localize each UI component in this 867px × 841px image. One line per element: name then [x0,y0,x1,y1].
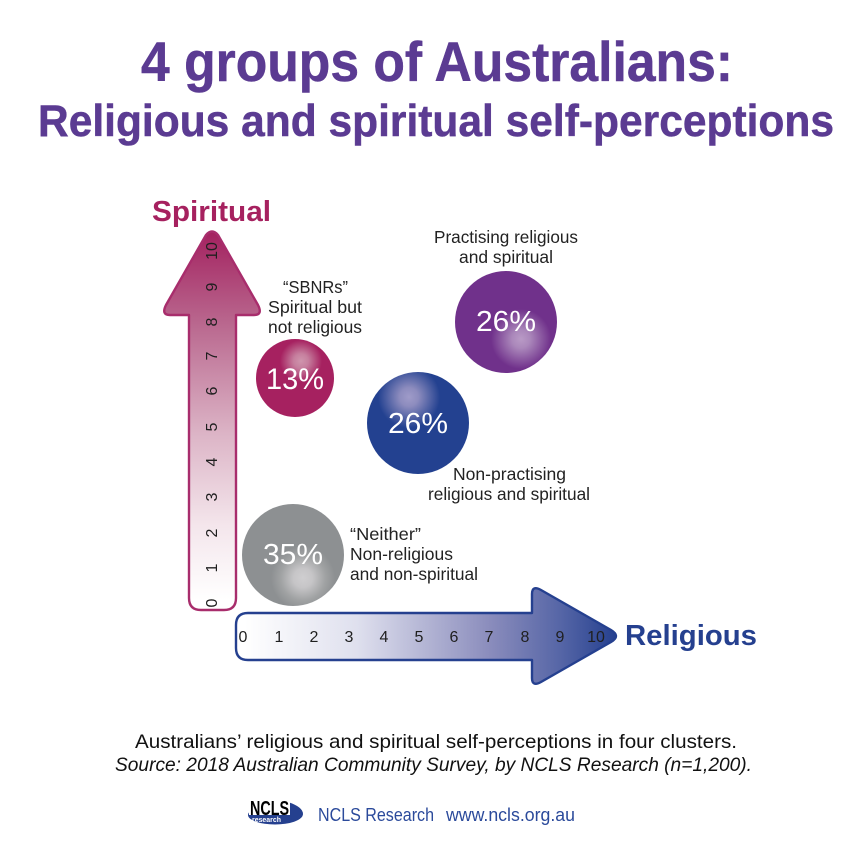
bubble: non-practising 26%: 26% [388,408,448,440]
label: non-practising religious and spiritual: religious and spiritual [428,484,590,504]
title line 1: 4 groups of Australians: [141,30,733,93]
label: SBNRs [268,277,362,337]
spiritual scale numbers: 10 [204,242,221,260]
bubble: non-practising 26% [367,372,469,474]
religious scale numbers: 8 [521,629,530,646]
caption [115,731,752,776]
religious scale numbers: 2 [310,629,319,646]
religious scale numbers: 0 [239,629,248,646]
bubble: neither 35%: 35% [263,539,323,571]
arrow: spiritual axis [164,232,260,610]
bubble: practising 26% [455,271,557,373]
label: practising religious and spiritual: Practising religious [434,227,578,247]
spiritual scale numbers: 5 [204,422,221,431]
title [38,30,834,146]
caption: Australians’ religious and spiritual self-perceptions in four clusters. [135,731,737,753]
footer: organisation and website: www.ncls.org.au [445,804,575,825]
footer: organisation and website: NCLS Research [318,804,434,825]
spiritual scale numbers: 2 [204,528,221,537]
spiritual scale numbers: 4 [204,457,221,466]
spiritual scale numbers [204,242,221,607]
label: non-practising religious and spiritual: Non-practising [453,464,566,484]
title line 2: Religious and spiritual self-perceptions [38,97,834,146]
religious scale numbers: 10 [587,629,605,646]
label: non-practising religious and spiritual [428,464,590,504]
label: SBNRs: Spiritual but [268,297,362,317]
logo: NCLS research: research [252,817,281,824]
religious scale numbers: 6 [450,629,459,646]
label: practising religious and spiritual: and spiritual [459,247,553,267]
caption: Source: 2018 Australian Community Survey, by NCLS Research (n=1,200). [115,754,752,776]
religious scale numbers: 9 [556,629,565,646]
religious scale numbers: 3 [345,629,354,646]
spiritual scale numbers: 8 [204,317,221,326]
bubble: practising 26%: 26% [476,306,536,338]
religious scale numbers: 4 [380,629,389,646]
label: neither: and non-spiritual [350,564,478,584]
spiritual scale numbers: 0 [204,598,221,607]
bubble: SBNRs 13%: 13% [266,363,324,396]
religious scale numbers [239,629,605,646]
religious scale numbers: 7 [485,629,494,646]
spiritual scale numbers: 9 [204,282,221,291]
bubble: neither 35% [242,504,344,606]
label: SBNRs: not religious [268,317,362,337]
logo: NCLS research: NCLS [250,798,289,820]
label: neither: Non-religious [350,544,453,564]
arrow: religious axis [236,588,616,684]
religious scale numbers: 5 [415,629,424,646]
heading: Spiritual axis: Spiritual [152,196,271,228]
heading: Religious axis: Religious [625,620,757,652]
spiritual scale numbers: 1 [204,563,221,572]
label: SBNRs: “SBNRs” [283,277,348,297]
label: neither [350,524,478,584]
religious scale numbers: 1 [275,629,284,646]
spiritual scale numbers: 3 [204,492,221,501]
spiritual scale numbers: 7 [204,351,221,360]
label: practising religious and spiritual [434,227,578,267]
bubble: SBNRs 13% [256,339,334,417]
spiritual scale numbers: 6 [204,386,221,395]
footer: organisation and website [318,804,575,825]
label: neither: “Neither” [350,524,421,544]
